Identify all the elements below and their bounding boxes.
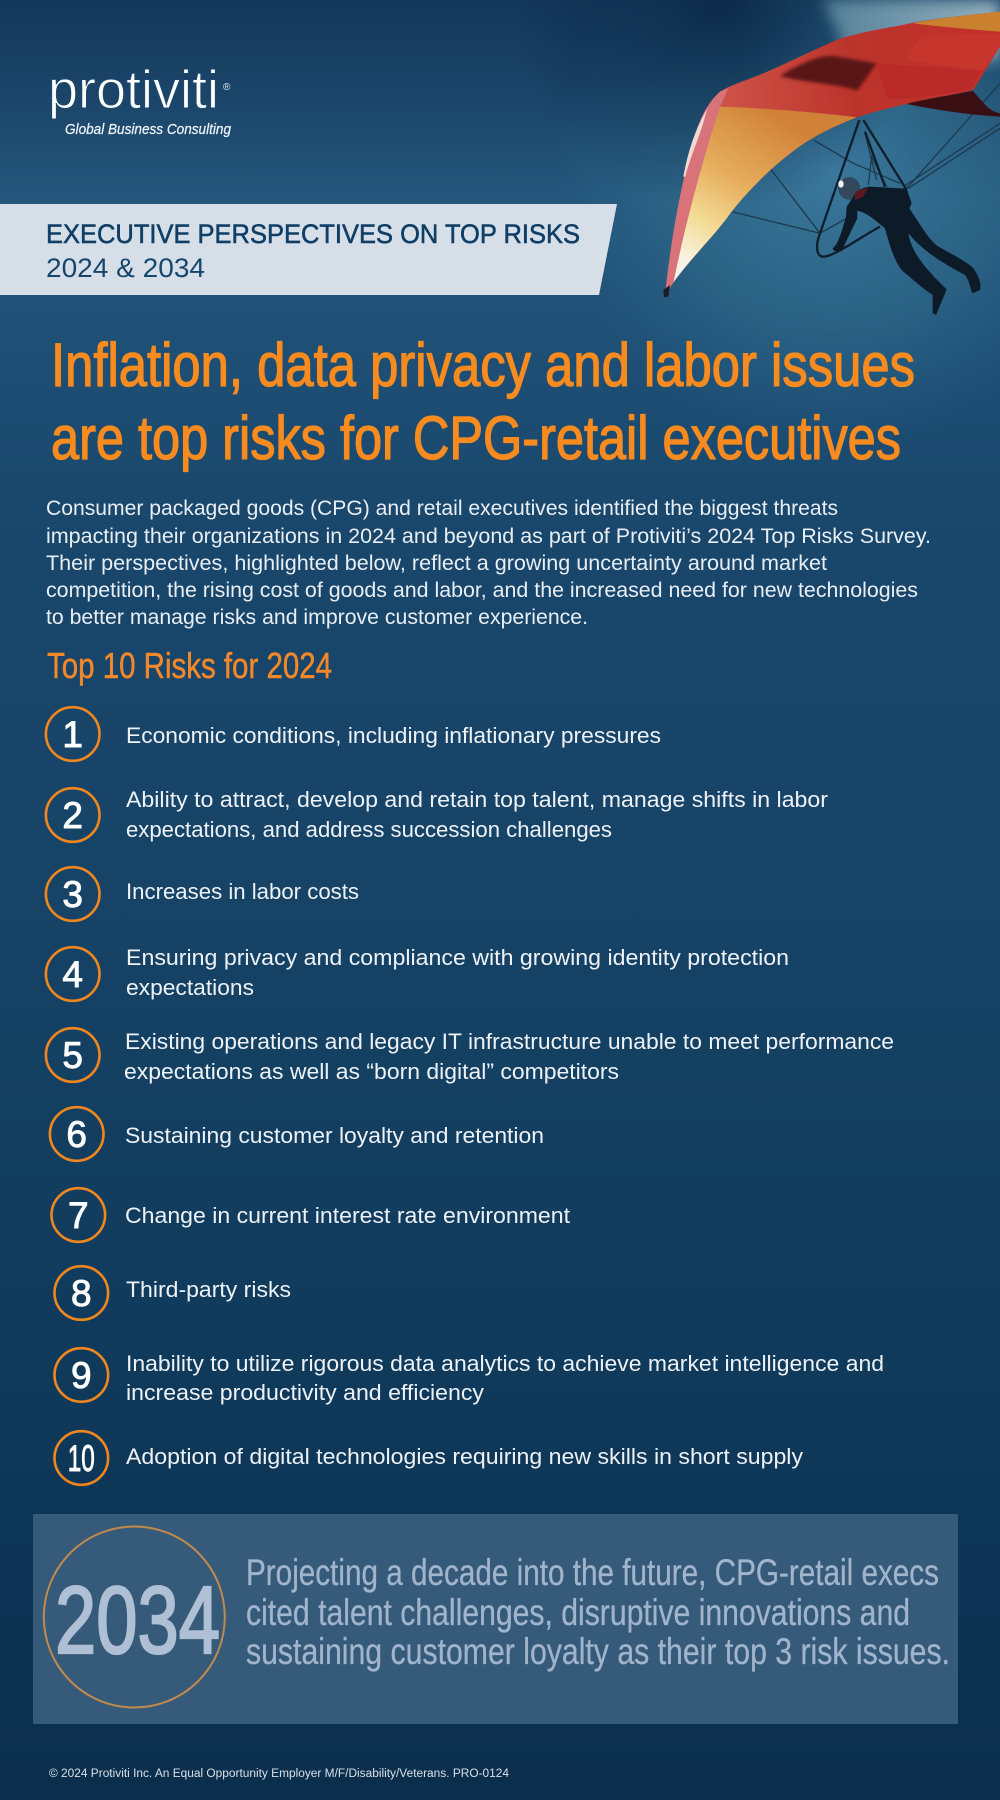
risk 9: increase productivity and efficiency — [126, 1380, 484, 1405]
risk 5: 5 — [62, 1035, 83, 1076]
risk 7: Change in current interest rate environment — [125, 1203, 570, 1228]
risk 10: 10 — [68, 1438, 95, 1479]
footer: © 2024 Protiviti Inc. An Equal Opportunity Employer M/F/Disability/Veterans. PRO-0124 — [49, 1768, 510, 1780]
intro paragraph — [46, 496, 931, 629]
pilot silhouette — [833, 177, 980, 315]
risk 8 — [55, 1266, 291, 1320]
2034 statement — [246, 1552, 950, 1672]
intro paragraph: impacting their organizations in 2024 and beyond as part of Protiviti’s 2024 Top Risks Survey. — [46, 524, 931, 548]
risk 4: expectations — [126, 975, 254, 1000]
band heading: EXECUTIVE PERSPECTIVES ON TOP RISKS — [46, 219, 580, 249]
intro paragraph: to better manage risks and improve customer experience. — [46, 605, 588, 629]
risk 2: Ability to attract, develop and retain top talent, manage shifts in labor — [126, 787, 828, 812]
intro paragraph: Consumer packaged goods (CPG) and retail executives identified the biggest threats — [46, 496, 838, 520]
risk 10: Adoption of digital technologies requiring new skills in short supply — [126, 1444, 803, 1469]
risk 2: expectations, and address succession challenges — [126, 817, 612, 842]
risk 7 — [52, 1188, 570, 1242]
risk 2: 2 — [62, 795, 83, 836]
rigging lines — [732, 83, 1000, 233]
risk 3 — [46, 867, 359, 921]
risk 9: 9 — [71, 1355, 92, 1396]
risk 1 — [46, 707, 661, 761]
2034 numeral: 2034 — [55, 1567, 220, 1674]
wordmark: protiviti — [48, 60, 219, 120]
risk 1: 1 — [62, 714, 83, 755]
risk 3: Increases in labor costs — [126, 879, 359, 904]
risk 5 — [46, 1028, 894, 1084]
risk 4: Ensuring privacy and compliance with growing identity protection — [126, 945, 789, 970]
risk 7: 7 — [68, 1195, 89, 1236]
intro paragraph: Their perspectives, highlighted below, reflect a growing uncertainty around market — [46, 551, 827, 575]
wing — [663, 12, 1000, 297]
header band — [0, 204, 617, 295]
section heading: Top 10 Risks for 2024 — [47, 645, 332, 686]
registered mark: ® — [223, 82, 231, 93]
risk 5: expectations as well as “born digital” competitors — [124, 1059, 619, 1084]
tagline: Global Business Consulting — [65, 122, 231, 138]
risk 8: 8 — [71, 1273, 92, 1314]
panel: 2034 outlook — [33, 1514, 958, 1724]
risk 1: Economic conditions, including inflationary pressures — [126, 723, 661, 748]
2034 circle — [44, 1526, 225, 1708]
intro paragraph: competition, the rising cost of goods and labor, and the increased need for new technologies — [46, 578, 918, 602]
risk 9: Inability to utilize rigorous data analytics to achieve market intelligence and — [126, 1351, 884, 1376]
logo — [48, 60, 231, 138]
control frame — [817, 120, 907, 257]
risk 6 — [50, 1107, 544, 1161]
risk 6: 6 — [66, 1114, 87, 1155]
risk 8: Third-party risks — [126, 1277, 291, 1302]
risk 10 — [55, 1431, 803, 1485]
risk 5: Existing operations and legacy IT infrastructure unable to meet performance — [125, 1029, 894, 1054]
risk 9 — [55, 1348, 884, 1405]
photo: hang glider — [663, 12, 1000, 315]
title — [51, 331, 915, 472]
risk 6: Sustaining customer loyalty and retention — [125, 1123, 544, 1148]
risk 4 — [46, 945, 789, 1001]
risk 2 — [46, 787, 828, 842]
risk list — [46, 707, 894, 1485]
band subheading: 2024 & 2034 — [46, 253, 205, 283]
risk 3: 3 — [62, 874, 83, 915]
risk 4: 4 — [62, 954, 83, 995]
